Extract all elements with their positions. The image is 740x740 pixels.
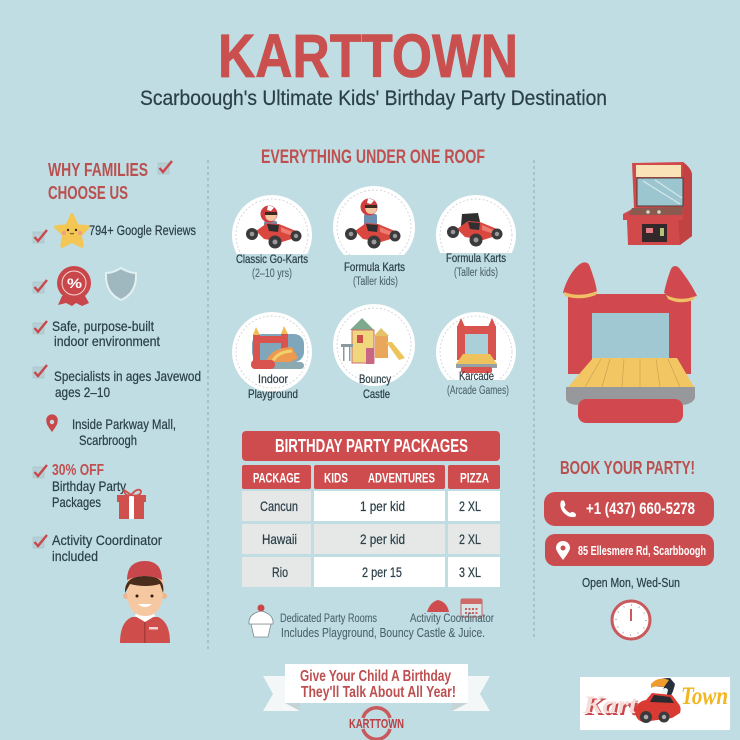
attraction: formula karts with driver: [330, 186, 418, 288]
item: safe indoor environment: [33, 318, 160, 349]
package notes: Dedicated Party Rooms: [280, 613, 377, 625]
banner: give your child a birthday: [263, 664, 490, 711]
table title bar: BIRTHDAY PARTY PACKAGES: [275, 436, 468, 456]
panel: birthday party packages: [242, 431, 500, 587]
item: location: Scarbroogh: [79, 432, 137, 448]
panel: why families choose us: [33, 159, 201, 643]
icon: cupcake: [249, 604, 273, 637]
row: hawaii: 2 XL: [459, 531, 481, 547]
icon: clock: [612, 601, 650, 639]
attraction: bouncy castle: Castle: [363, 387, 390, 401]
attraction: karcade: Karcade: [459, 369, 494, 383]
small karttown logo: [349, 708, 404, 739]
item: 30% off: Birthday Party: [52, 478, 126, 494]
package notes: Activity Coordinator: [410, 613, 494, 625]
attraction: indoor playground: [232, 312, 312, 401]
attraction: classic go-karts: [228, 195, 316, 280]
table header: PACKAGE: [253, 470, 300, 486]
panel: attractions: [228, 186, 520, 401]
item: specialists: Specialists in ages Javewod: [54, 368, 201, 384]
kart town logo: Kart: [582, 692, 638, 719]
item: 30% off: Packages: [52, 494, 101, 510]
row: rio: 3 XL: [459, 564, 481, 580]
attraction: indoor playground: Indoor: [258, 372, 288, 386]
heading: why families: WHY FAMILIES: [48, 159, 148, 180]
row: hawaii: [242, 524, 500, 554]
toucan: [651, 678, 675, 700]
item: 30% off: [33, 462, 126, 510]
panel: book your party: [544, 457, 714, 639]
attraction: formula karts with driver: (Taller kids): [353, 276, 398, 288]
heading: why families: [48, 159, 172, 203]
table title bar: [242, 431, 500, 461]
attraction: classic go-karts: (2–10 yrs): [252, 268, 292, 280]
item: specialists: ages 2–10: [55, 384, 110, 400]
icon: arcade cabinet: [623, 162, 692, 245]
package notes: Includes Playground, Bouncy Castle & Juice.: [281, 626, 485, 640]
button: phone: +1 (437) 660-5278: [586, 500, 695, 518]
row: cancun: 1 per kid: [360, 498, 405, 514]
red car: [635, 693, 681, 722]
attraction: bouncy castle: [333, 304, 415, 401]
attraction: indoor playground: Playground: [248, 387, 298, 401]
title: KARTTOWN: [218, 22, 518, 90]
banner: give your child a birthday: They'll Talk About All Year!: [301, 684, 456, 701]
item: 30% off: 30% OFF: [52, 462, 104, 479]
item: activity coordinator: [33, 532, 162, 564]
row: hawaii: 2 per kid: [360, 531, 405, 547]
item: specialists: [33, 365, 201, 400]
kart town logo: Kart: [584, 694, 640, 721]
attraction: karcade: [432, 312, 520, 398]
attraction: classic go-karts: Classic Go-Karts: [236, 252, 308, 266]
attraction: formula karts empty: [432, 195, 520, 279]
item: safe indoor environment: indoor environment: [54, 333, 160, 349]
item: activity coordinator: included: [52, 548, 98, 564]
item: activity coordinator: Activity Coordinator: [52, 532, 162, 548]
item: google reviews: [33, 215, 196, 246]
row: rio: [242, 557, 500, 587]
attraction: formula karts empty: Formula Karts: [446, 251, 506, 265]
button: address: [545, 534, 714, 566]
table header: KIDS: [324, 470, 348, 486]
item: discount badge and shield: [33, 266, 136, 306]
table header: ADVENTURES: [368, 470, 435, 486]
heading: everything under one roof: EVERYTHING UNDER ONE ROOF: [261, 146, 485, 168]
button: phone: [544, 492, 714, 526]
kart town logo: Town: [681, 683, 728, 710]
table header: [242, 465, 500, 489]
attraction: bouncy castle: Bouncy: [359, 372, 391, 386]
row: hawaii: Hawaii: [262, 531, 297, 547]
item: location: Inside Parkway Mall,: [72, 416, 176, 432]
row: cancun: [242, 491, 500, 521]
item: google reviews: 794+ Google Reviews: [89, 222, 196, 238]
opening hours: Open Mon, Wed-Sun: [582, 575, 680, 590]
item: safe indoor environment: Safe, purpose-built: [52, 318, 154, 334]
banner: give your child a birthday: Give Your Child A Birthday: [300, 668, 451, 685]
attraction: karcade: (Arcade Games): [447, 385, 509, 397]
kart town logo: [580, 677, 730, 730]
item: discount badge and shield: %: [67, 275, 83, 291]
row: rio: Rio: [272, 564, 288, 580]
row: rio: 2 per 15: [362, 564, 402, 580]
table header: PIZZA: [460, 470, 489, 486]
icon: gift: [117, 490, 146, 519]
icon: small cake: [427, 600, 449, 612]
row: cancun: Cancun: [260, 498, 298, 514]
heading: why families: CHOOSE US: [48, 182, 128, 203]
subtitle: Scarboough's Ultimate Kids' Birthday Party Destination: [140, 87, 607, 110]
attraction: formula karts empty: (Taller kids): [454, 267, 498, 279]
attraction: formula karts with driver: Formula Karts: [344, 260, 405, 274]
row: cancun: 2 XL: [459, 498, 481, 514]
icon: bouncy castle large: [563, 262, 697, 423]
item: location: [46, 414, 176, 448]
icon: calendar: [461, 599, 482, 617]
small karttown logo: KARTTOWN: [349, 717, 404, 731]
package notes: [280, 613, 494, 640]
icon: coordinator person: [120, 561, 170, 643]
